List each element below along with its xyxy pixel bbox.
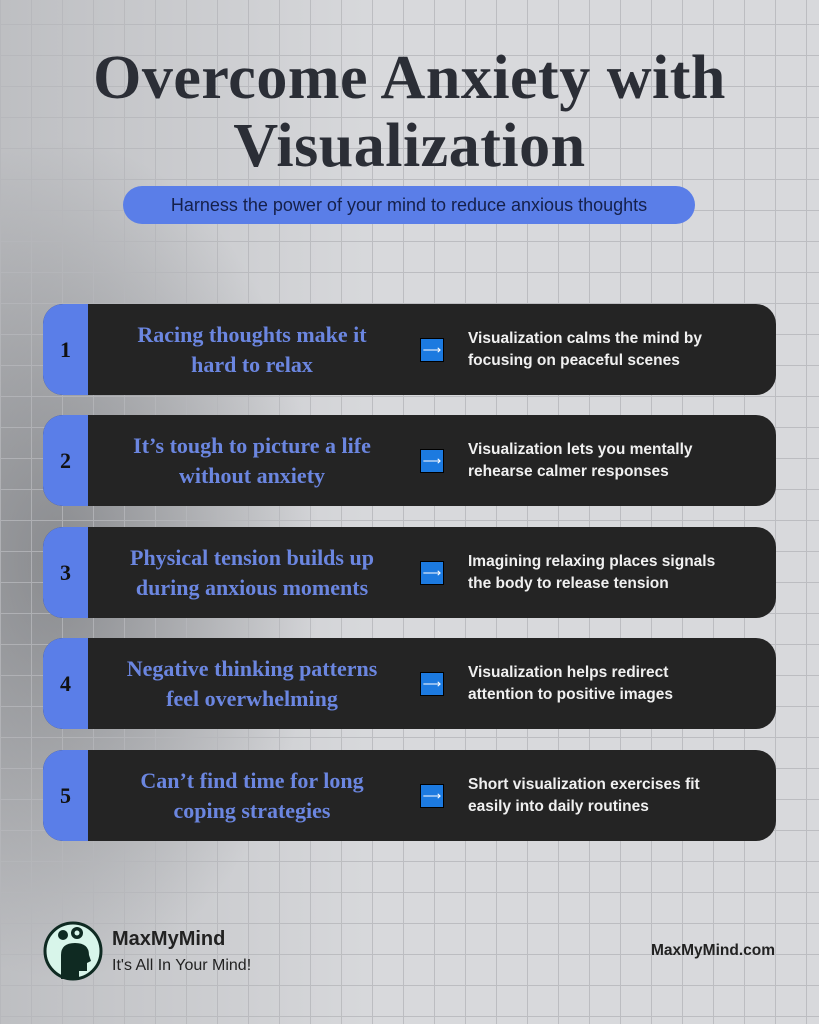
card 1: Racing thoughts make it bbox=[137, 322, 367, 346]
card 2: ⟶ bbox=[423, 453, 441, 468]
card 1: focusing on peaceful scenes bbox=[468, 352, 680, 368]
card 2 bbox=[43, 415, 776, 506]
card 5: Short visualization exercises fit bbox=[468, 776, 700, 792]
card 3: ⟶ bbox=[423, 565, 441, 580]
card 3: the body to release tension bbox=[468, 574, 669, 592]
card 5: easily into daily routines bbox=[468, 798, 649, 814]
brand text: It's All In Your Mind! bbox=[112, 957, 251, 974]
card 3: Physical tension builds up bbox=[130, 544, 374, 570]
card 4: feel overwhelming bbox=[166, 686, 338, 710]
card 2: Visualization lets you mentally bbox=[468, 440, 693, 458]
subtitle pill: Harness the power of your mind to reduce anxious thoughts bbox=[171, 195, 647, 215]
card 5: coping strategies bbox=[173, 798, 330, 822]
website: MaxMyMind.com bbox=[651, 942, 775, 959]
card 1 bbox=[43, 304, 776, 395]
card 2: 2 bbox=[60, 448, 71, 472]
card 3 bbox=[43, 527, 776, 618]
card 1: ⟶ bbox=[423, 342, 441, 357]
card 1: 1 bbox=[60, 336, 71, 362]
card 1: hard to relax bbox=[191, 352, 313, 376]
card 4: Negative thinking patterns bbox=[127, 656, 377, 680]
card 2: It’s tough to picture a life bbox=[133, 432, 371, 458]
card 5 bbox=[43, 750, 776, 841]
brand text bbox=[112, 928, 251, 974]
card 5: ⟶ bbox=[423, 788, 441, 803]
card 5: 5 bbox=[60, 782, 71, 808]
card 1: Visualization calms the mind by bbox=[468, 330, 702, 346]
title: Overcome Anxiety with bbox=[93, 44, 726, 112]
logo icon bbox=[44, 922, 102, 980]
card 4: ⟶ bbox=[423, 676, 441, 691]
card 4: 4 bbox=[60, 670, 71, 696]
card 4 bbox=[43, 638, 776, 729]
card 3: Imagining relaxing places signals bbox=[468, 552, 715, 570]
title bbox=[93, 44, 726, 180]
card 3: during anxious moments bbox=[136, 574, 368, 600]
brand text: MaxMyMind bbox=[112, 928, 225, 950]
card 2: without anxiety bbox=[179, 462, 325, 488]
card 4: attention to positive images bbox=[468, 686, 673, 702]
subtitle pill bbox=[123, 186, 695, 224]
card 3: 3 bbox=[60, 560, 71, 584]
card 2: rehearse calmer responses bbox=[468, 462, 669, 480]
card 4: Visualization helps redirect bbox=[468, 664, 668, 680]
title: Visualization bbox=[233, 112, 586, 180]
card 5: Can’t find time for long bbox=[140, 768, 364, 792]
